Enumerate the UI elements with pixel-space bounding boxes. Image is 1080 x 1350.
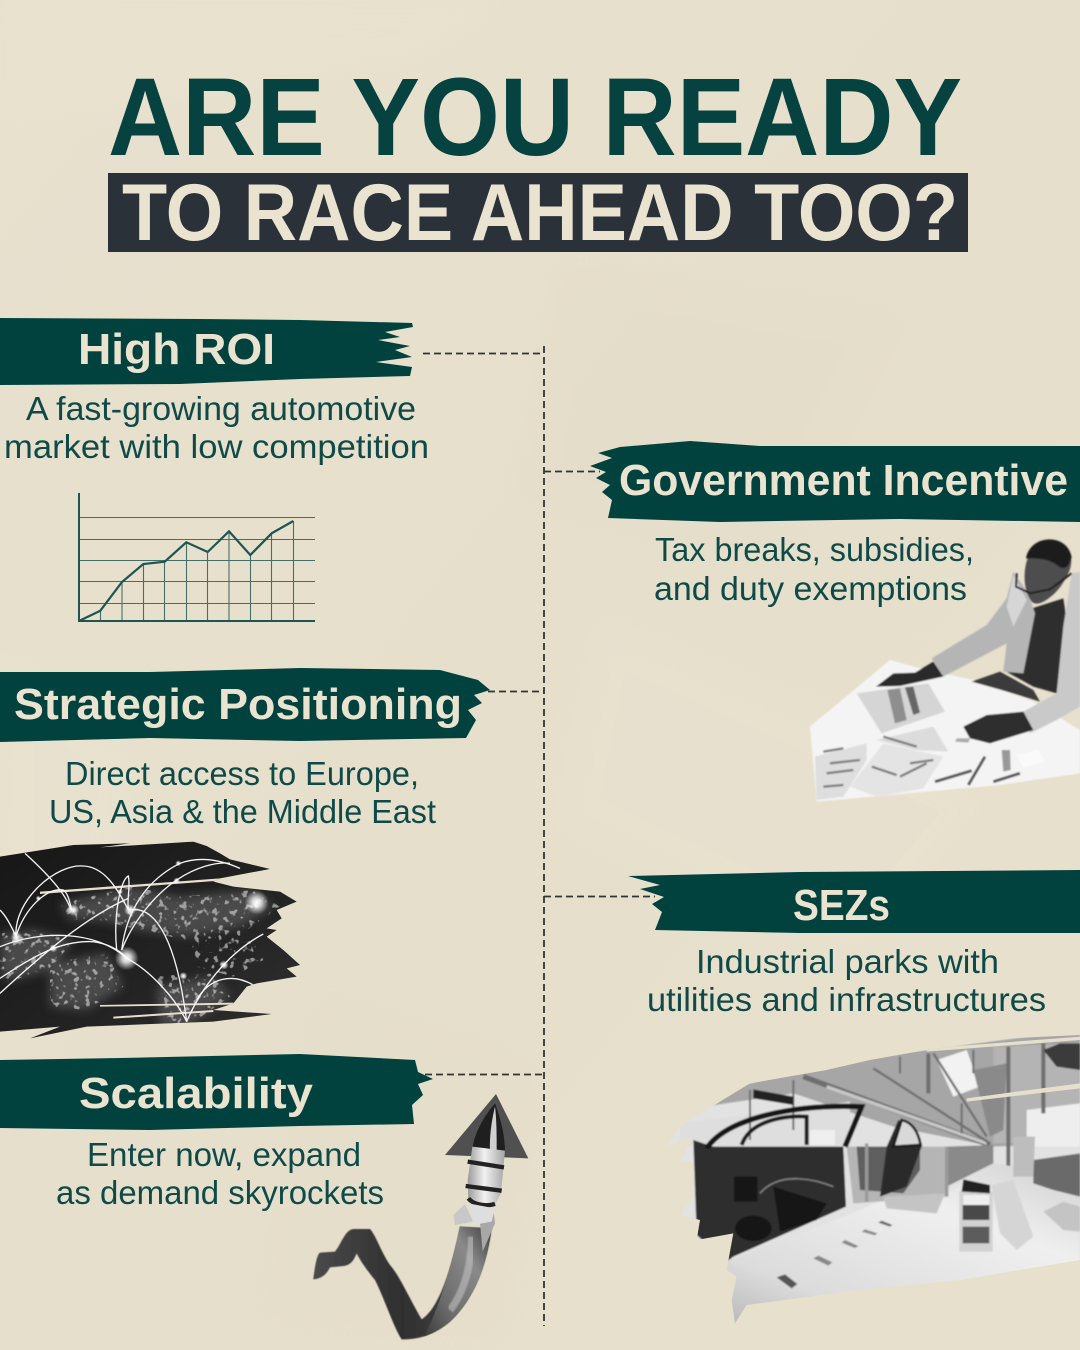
photo: car assembly line — [660, 1030, 1080, 1330]
heading: High ROI: High ROI — [78, 325, 275, 374]
description: Strategic Positioning — [49, 755, 436, 830]
ribbon trail — [313, 1227, 492, 1339]
panel: SEZs — [628, 870, 1080, 1330]
image: world map with flight arcs — [0, 830, 300, 1043]
description: Government Incentive: Tax breaks, subsidies, — [655, 531, 974, 568]
title line two on dark bar: TO RACE AHEAD TOO? — [122, 168, 958, 258]
title — [108, 56, 968, 258]
description: High ROI: market with low competition — [4, 428, 429, 465]
photo: man reviewing documents — [810, 539, 1080, 802]
icon: rocket on rising trail — [313, 1094, 528, 1339]
second door and rack — [847, 1120, 993, 1213]
heading: Scalability — [0, 1054, 433, 1130]
factory floor — [727, 1164, 1080, 1323]
desk — [810, 660, 1080, 802]
heading: SEZs: SEZs — [793, 881, 890, 930]
heading: SEZs — [628, 870, 1080, 933]
description: SEZs: utilities and infrastructures — [647, 981, 1046, 1018]
description: Scalability: as demand skyrockets — [56, 1174, 384, 1211]
dashed connector lines — [423, 346, 655, 1326]
door frame — [693, 1140, 846, 1262]
description: High ROI: A fast-growing automotive — [26, 390, 416, 427]
description: SEZs — [647, 943, 1046, 1018]
heading: Government Incentive — [590, 441, 1080, 522]
title line one: ARE YOU READY — [108, 56, 962, 179]
description: Scalability: Enter now, expand — [87, 1136, 361, 1173]
rocket body — [468, 1147, 505, 1205]
heading: Strategic Positioning: Strategic Positioning — [14, 680, 462, 729]
arrow head — [445, 1094, 528, 1158]
panel: Strategic Positioning — [0, 668, 490, 1043]
rocket nose — [472, 1103, 505, 1152]
description: Strategic Positioning: Direct access to Europe, — [65, 755, 419, 792]
description: Government Incentive: and duty exemptions — [654, 570, 967, 607]
panel: Scalability — [0, 1054, 528, 1339]
description: Strategic Positioning: US, Asia & the Middle East — [49, 793, 436, 830]
description: SEZs: Industrial parks with — [696, 943, 999, 980]
heading: Scalability: Scalability — [79, 1069, 314, 1118]
documents — [857, 683, 945, 733]
description: Scalability — [56, 1136, 384, 1211]
heading: Strategic Positioning — [0, 668, 490, 742]
rocket fins — [453, 1204, 473, 1225]
tool cart — [959, 1179, 993, 1252]
panel: Government Incentive — [590, 441, 1080, 802]
heading: Government Incentive: Government Incentive — [619, 456, 1068, 505]
panel: High ROI — [0, 318, 429, 621]
line chart — [79, 493, 315, 621]
heading: High ROI — [0, 318, 413, 385]
description: High ROI — [4, 390, 429, 465]
description: Government Incentive — [654, 531, 974, 607]
